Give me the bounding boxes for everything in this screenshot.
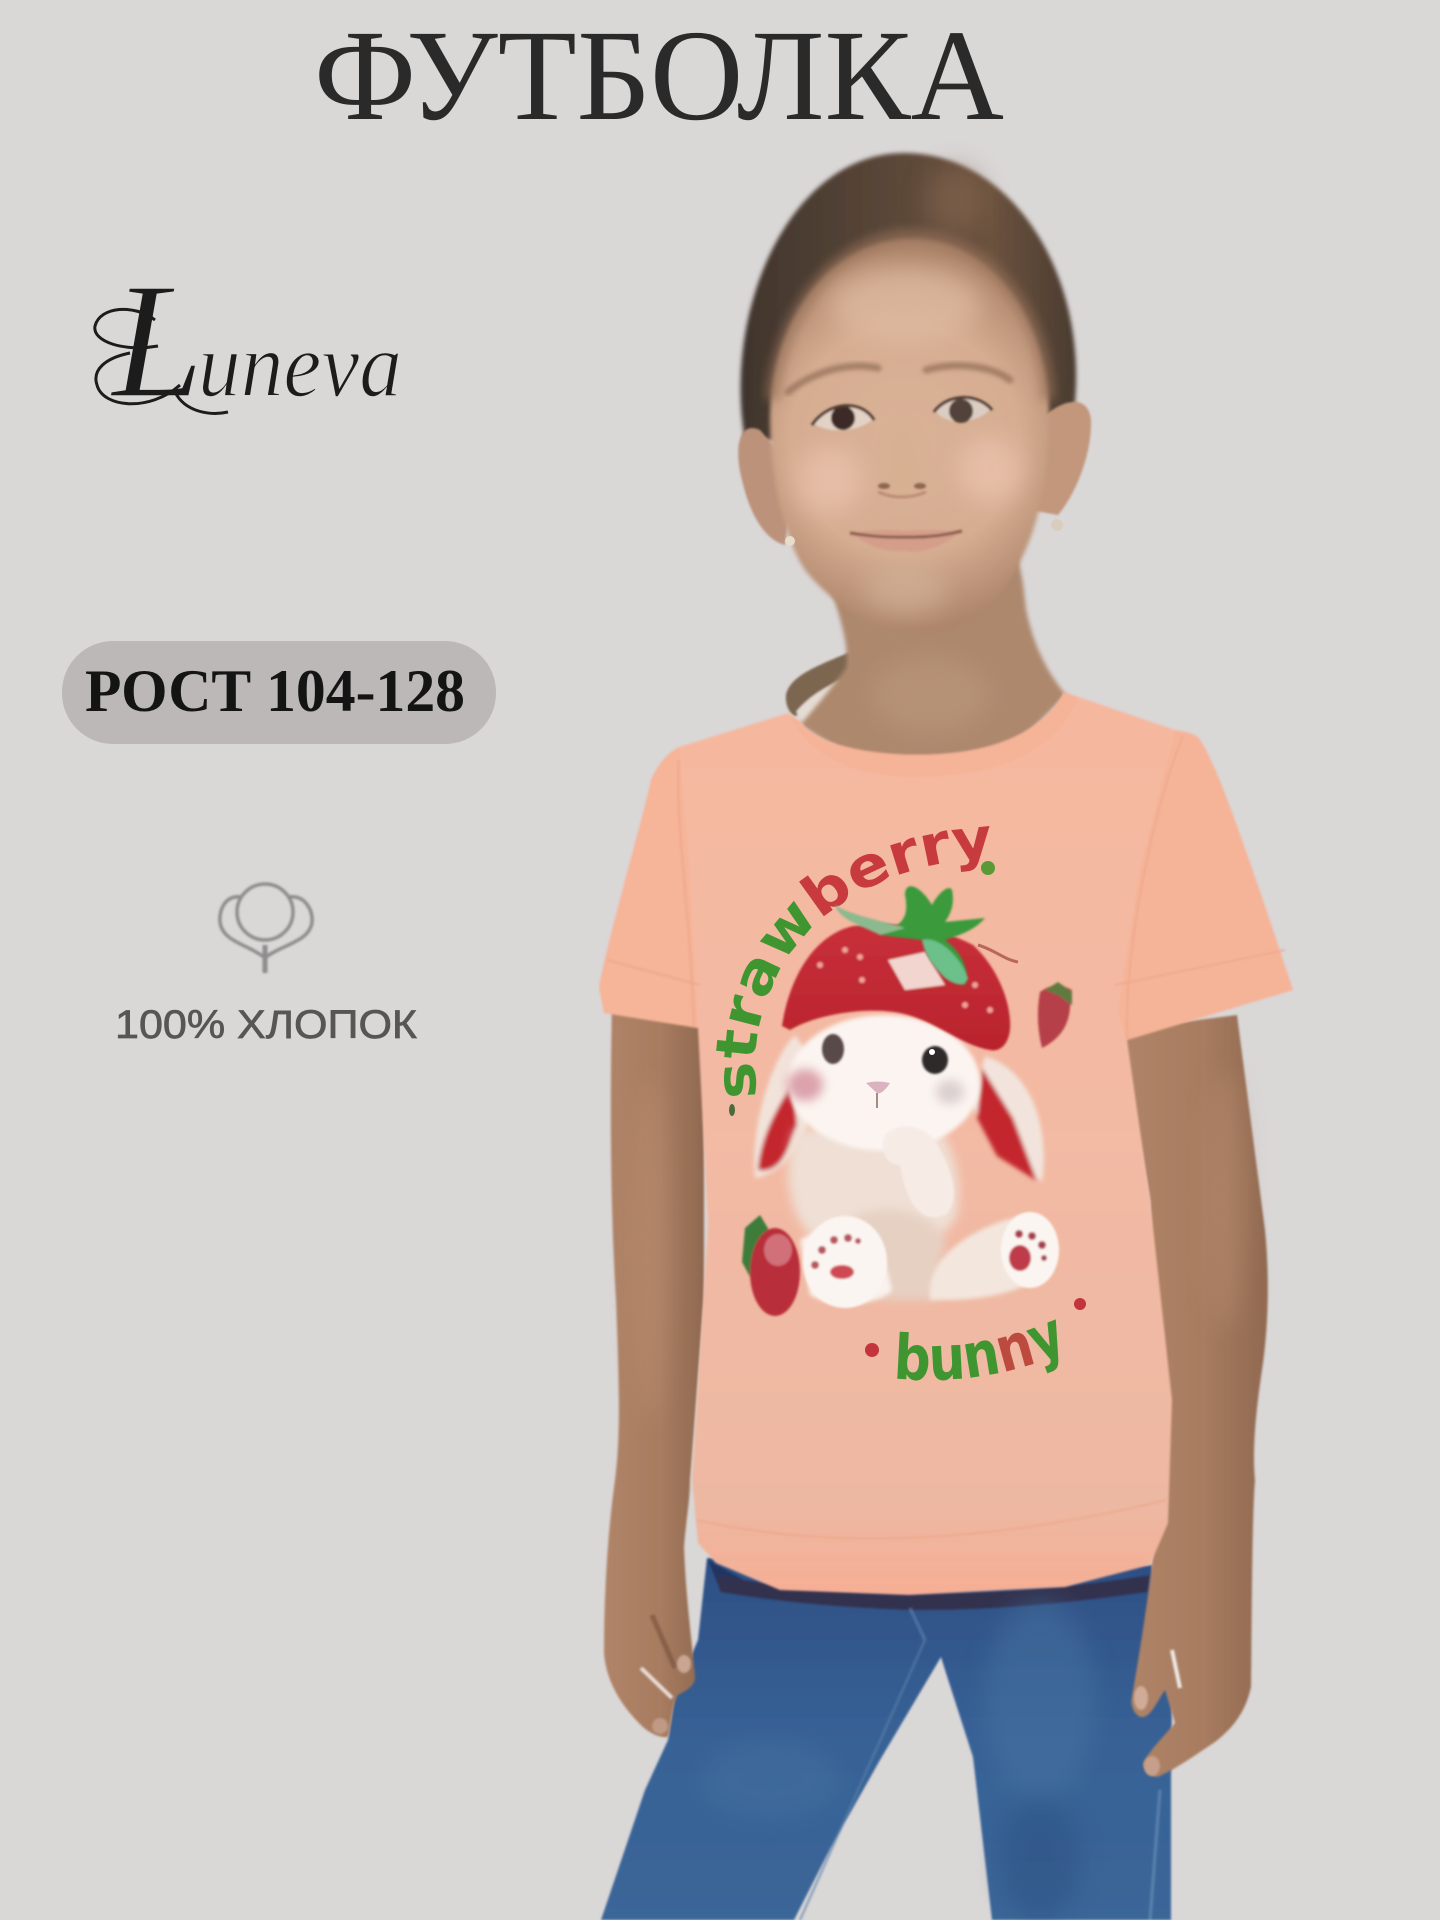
logo: Luneva: uneva (198, 314, 402, 416)
bunny cheek (787, 1069, 823, 1101)
text: strawberry: strawberry (716, 826, 990, 1096)
strawberry left (742, 1215, 800, 1316)
bunny ears (754, 1035, 1044, 1182)
title: ФУТБОЛКА (314, 4, 1004, 148)
collar band (788, 692, 1078, 777)
dot green (981, 861, 995, 875)
dot small (729, 1104, 735, 1116)
logo: Luneva (95, 249, 402, 432)
right arm and hand (1120, 1015, 1268, 1777)
hair (741, 153, 1076, 440)
sleeves (599, 747, 698, 1028)
strawberry right (1038, 982, 1072, 1048)
hat leaves (835, 886, 985, 985)
bunny right foot (1001, 1212, 1059, 1288)
mouth (850, 530, 962, 552)
jeans (601, 1558, 1172, 1920)
ponytail (786, 652, 852, 722)
fingers detail (641, 1615, 1180, 1776)
face (770, 238, 1049, 634)
height badge: РОСТ 104-128 (85, 658, 465, 724)
bunny left foot (803, 1216, 887, 1308)
bunny head (788, 1015, 980, 1151)
brows (788, 366, 1010, 392)
photo: girl in t-shirt (598, 150, 1294, 1920)
bunny body (788, 1120, 959, 1258)
head (738, 153, 1091, 634)
material: cotton (115, 884, 418, 1047)
earrings (785, 536, 795, 546)
bunny right leg (930, 1215, 1052, 1300)
neck (800, 555, 1066, 762)
left ear (738, 428, 795, 545)
t-shirt (599, 692, 1293, 1595)
text: bunny: bunny (897, 1319, 1058, 1381)
bunny belly (850, 1210, 945, 1300)
label: 100% cotton: 100% ХЛОПОК (115, 1003, 418, 1047)
bunny left leg (800, 1227, 892, 1304)
shirt body (599, 692, 1293, 1595)
eyes (812, 397, 992, 430)
print: strawberry bunny (716, 826, 1086, 1381)
logo: Luneva: L (110, 249, 204, 432)
bunny hat (782, 924, 1010, 1050)
left arm and hand (604, 1000, 704, 1737)
bunny paw (883, 1127, 954, 1217)
bunny eyes (822, 1034, 844, 1064)
nose (878, 483, 926, 497)
height badge (62, 641, 496, 744)
right ear (1030, 402, 1091, 515)
bunny nose (866, 1082, 890, 1093)
icon: cotton boll (220, 884, 312, 973)
dots red (865, 1343, 879, 1357)
